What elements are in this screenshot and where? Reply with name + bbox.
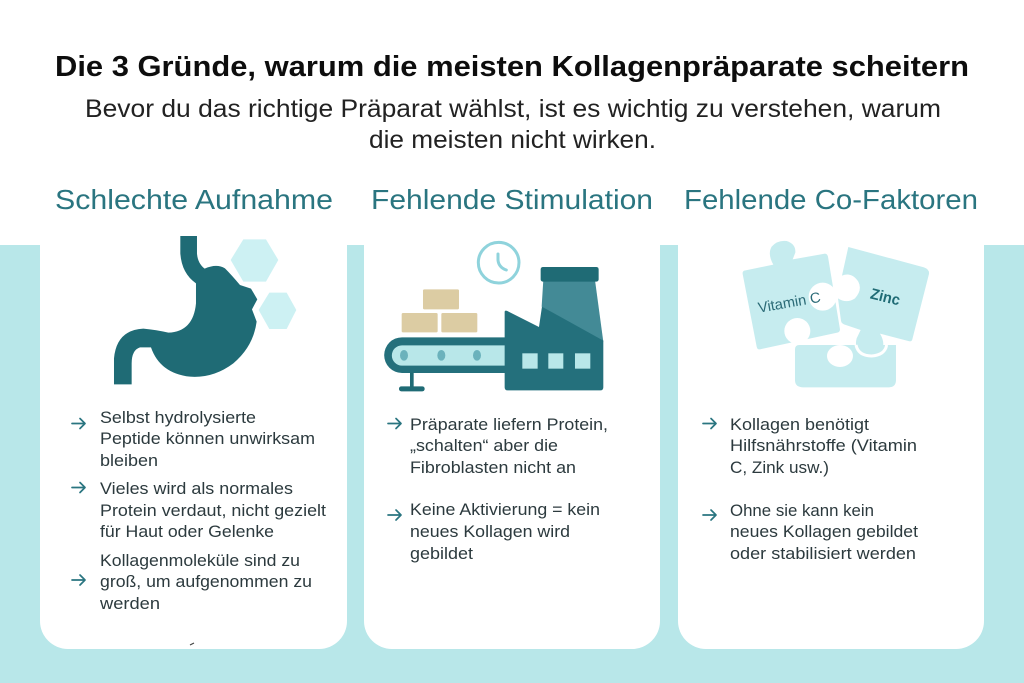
bullet: hydrolysierte Peptide: bleiben — [100, 452, 158, 470]
bullet: Ohne sie kein Kollagen: neues Kollagen gebildet — [730, 523, 918, 541]
panel: Fehlende Co-Faktoren — [678, 184, 984, 649]
bullet: Ohne sie kein Kollagen — [703, 502, 918, 563]
bullet: Kollagenmoleküle: groß, um aufgenommen zu — [100, 573, 312, 591]
subtitle: die meisten nicht wirken. — [369, 126, 656, 154]
bullet: Hilfsnährstoffe: Kollagen benötigt — [730, 416, 869, 434]
icon: stomach with hexagons — [114, 236, 296, 384]
bullet: Präparate liefern Protein: Fibroblasten nicht an — [410, 459, 576, 477]
bullet: Keine Aktivierung: gebildet — [410, 545, 473, 563]
heading: Fehlende Co-Faktoren: Fehlende Co-Faktoren — [684, 184, 978, 215]
bullet: Kollagenmoleküle: Kollagenmoleküle sind zu — [100, 552, 300, 570]
heading: Schlechte Aufnahme: Schlechte Aufnahme — [55, 184, 333, 215]
bullet: Kollagenmoleküle: werden — [99, 595, 160, 613]
bullet: Präparate liefern Protein — [388, 416, 608, 477]
bullet: Kollagenmoleküle — [72, 552, 312, 613]
bullet: normales Protein — [72, 480, 326, 541]
bullet: Ohne sie kein Kollagen: oder stabilisiert werden — [730, 545, 916, 563]
bullet: normales Protein: für Haut oder Gelenke — [100, 523, 274, 541]
bullet: hydrolysierte Peptide — [72, 409, 315, 470]
icon: factory with conveyor belt — [384, 242, 603, 391]
bullet: Hilfsnährstoffe: Hilfsnährstoffe (Vitamin — [730, 437, 917, 455]
bullet: Keine Aktivierung: neues Kollagen wird — [410, 523, 570, 541]
bullet: Keine Aktivierung — [388, 501, 600, 563]
icon: puzzle pieces: Vitamin C — [757, 290, 822, 317]
bullet: Keine Aktivierung: Keine Aktivierung = kein — [410, 501, 600, 519]
subtitle — [85, 95, 941, 154]
bullet: Präparate liefern Protein: „schalten“ aber die — [410, 437, 558, 455]
bullet: Präparate liefern Protein: Präparate liefern Protein, — [410, 416, 608, 434]
bullet: hydrolysierte Peptide: Selbst hydrolysierte — [100, 409, 256, 427]
subtitle: Bevor du das richtige Präparat wählst, ist es wichtig zu verstehen, warum — [85, 95, 941, 123]
icon: puzzle pieces — [743, 241, 929, 387]
panel: Fehlende Stimulation — [364, 184, 660, 649]
panel: Schlechte Aufnahme — [40, 184, 347, 649]
bullet: normales Protein: Protein verdaut, nicht gezielt — [100, 502, 326, 520]
bullet: Hilfsnährstoffe: C, Zink usw.) — [730, 459, 829, 477]
title: Die 3 Gründe, warum die meisten Kollagenpräparate scheitern — [55, 51, 969, 83]
bullet: Ohne sie kein Kollagen: Ohne sie kann kein — [730, 502, 874, 520]
bullet: normales Protein: Vieles wird als normales — [100, 480, 293, 498]
bullet: Hilfsnährstoffe — [703, 416, 917, 477]
icon: puzzle pieces: Zinc — [869, 286, 902, 309]
bullet: hydrolysierte Peptide: Peptide können unwirksam — [100, 430, 315, 448]
heading: Fehlende Stimulation: Fehlende Stimulation — [371, 184, 653, 215]
